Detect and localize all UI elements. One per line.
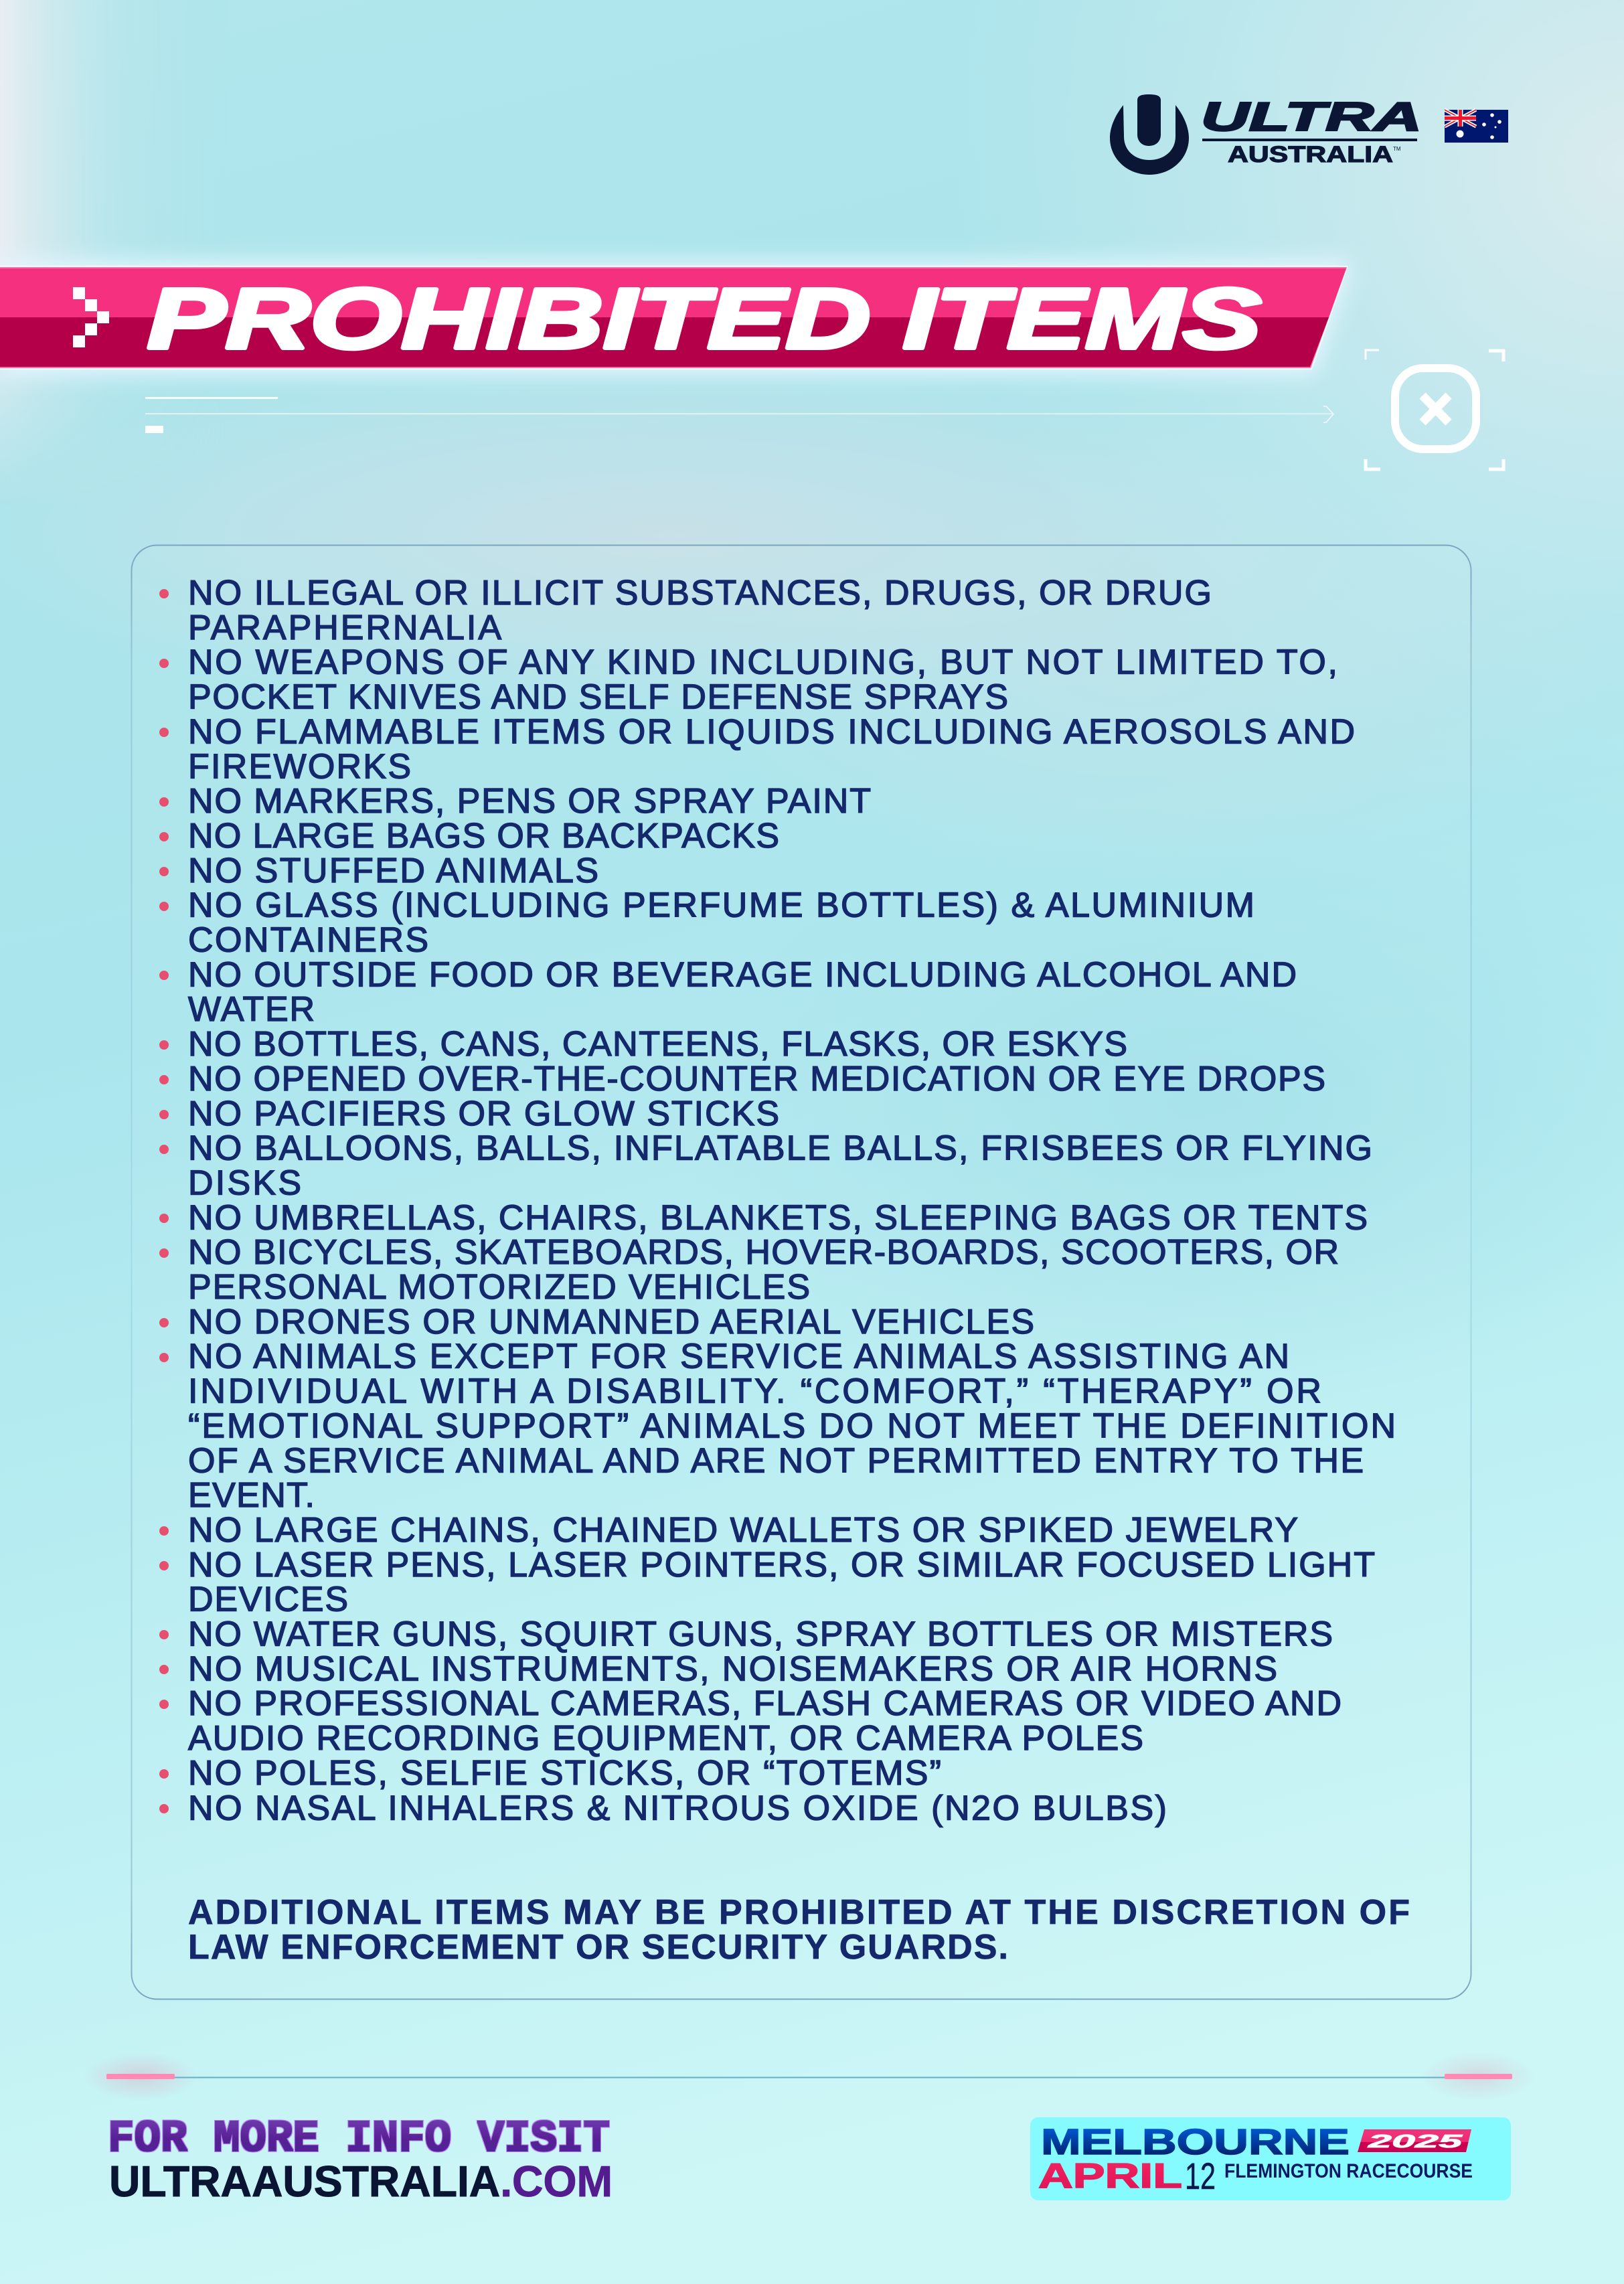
list item: drugs: PARAPHERNALIA bbox=[188, 608, 501, 647]
list item: glass bbox=[159, 886, 1254, 960]
icon: Ultra U mark bbox=[1110, 94, 1189, 175]
list item: inhalers: NO NASAL INHALERS & NITROUS OXIDE (N2O BULBS) bbox=[188, 1789, 1167, 1827]
icon: prohibited X bbox=[1366, 350, 1504, 469]
venue: FLEMINGTON RACECOURSE bbox=[1224, 2160, 1473, 2182]
wordmark: AUSTRALIA: AUSTRALIA bbox=[1228, 142, 1393, 167]
list item: bicycles: PERSONAL MOTORIZED VEHICLES bbox=[188, 1268, 810, 1307]
list item: animals: INDIVIDUAL WITH A DISABILITY. “COMFORT,” “THERAPY” OR bbox=[188, 1372, 1321, 1411]
list item: drones: NO DRONES OR UNMANNED AERIAL VEHICLES bbox=[188, 1303, 1034, 1341]
list item: food and beverage bbox=[159, 955, 1297, 1029]
city: MELBOURNE bbox=[1041, 2122, 1350, 2162]
closing note: LAW ENFORCEMENT OR SECURITY GUARDS. bbox=[188, 1928, 1008, 1967]
list item: instruments: NO MUSICAL INSTRUMENTS, NOISEMAKERS OR AIR HORNS bbox=[188, 1649, 1277, 1688]
footer: more info bbox=[108, 2114, 613, 2206]
panel: prohibited items list bbox=[131, 545, 1471, 1999]
title banner bbox=[0, 261, 1352, 375]
list item: cameras: NO PROFESSIONAL CAMERAS, FLASH CAMERAS OR VIDEO AND bbox=[188, 1684, 1342, 1723]
list item: glass: CONTAINERS bbox=[188, 921, 428, 960]
list item: bottles: NO BOTTLES, CANS, CANTEENS, FLASKS, OR ESKYS bbox=[188, 1025, 1127, 1064]
year tag: 2025 bbox=[1367, 2131, 1463, 2151]
list item: bicycles: NO BICYCLES, SKATEBOARDS, HOVER-BOARDS, SCOOTERS, OR bbox=[188, 1233, 1339, 1272]
list item: animals: OF A SERVICE ANIMAL AND ARE NOT PERMITTED ENTRY TO THE bbox=[188, 1441, 1364, 1480]
list item: medication: NO OPENED OVER-THE-COUNTER MEDICATION OR EYE DROPS bbox=[188, 1060, 1325, 1098]
list item: cameras: AUDIO RECORDING EQUIPMENT, OR CAMERA POLES bbox=[188, 1719, 1143, 1758]
list item: glass: NO GLASS (INCLUDING PERFUME BOTTLES) & ALUMINIUM bbox=[188, 886, 1254, 925]
list item: food and beverage: WATER bbox=[188, 990, 315, 1029]
list item: lasers: NO LASER PENS, LASER POINTERS, OR SIMILAR FOCUSED LIGHT bbox=[188, 1546, 1375, 1584]
list item: drugs bbox=[159, 574, 1212, 647]
icon: Australian flag bbox=[1445, 110, 1508, 143]
list item: animals: NO ANIMALS EXCEPT FOR SERVICE ANIMALS ASSISTING AN bbox=[188, 1337, 1289, 1376]
website url: ULTRAAUSTRALIA.COM bbox=[109, 2157, 613, 2206]
list item: poles: NO POLES, SELFIE STICKS, OR “TOTEMS” bbox=[188, 1754, 941, 1793]
closing note bbox=[188, 1893, 1410, 1967]
footer divider bbox=[84, 2052, 1535, 2101]
list item: drugs: NO ILLEGAL OR ILLICIT SUBSTANCES, DRUGS, OR DRUG bbox=[188, 574, 1212, 613]
list item: flammables: FIREWORKS bbox=[188, 747, 411, 786]
logo: Ultra Australia bbox=[1110, 94, 1422, 175]
list item: stuffed animals: NO STUFFED ANIMALS bbox=[188, 851, 598, 890]
list item: food and beverage: NO OUTSIDE FOOD OR BEVERAGE INCLUDING ALCOHOL AND bbox=[188, 955, 1297, 994]
icon: pixel chevron bbox=[73, 287, 109, 347]
list item: weapons: POCKET KNIVES AND SELF DEFENSE SPRAYS bbox=[188, 678, 1008, 717]
list item: bags: NO LARGE BAGS OR BACKPACKS bbox=[188, 817, 779, 855]
list item: chains: NO LARGE CHAINS, CHAINED WALLETS OR SPIKED JEWELRY bbox=[188, 1511, 1298, 1550]
list item: flammables: NO FLAMMABLE ITEMS OR LIQUIDS INCLUDING AEROSOLS AND bbox=[188, 712, 1355, 751]
list item: weapons: NO WEAPONS OF ANY KIND INCLUDING, BUT NOT LIMITED TO, bbox=[188, 643, 1337, 682]
badge: Melbourne event details bbox=[1030, 2117, 1511, 2200]
list item: water guns: NO WATER GUNS, SQUIRT GUNS, SPRAY BOTTLES OR MISTERS bbox=[188, 1615, 1333, 1653]
heading: for more info visit: FOR MORE INFO VISIT bbox=[108, 2114, 610, 2165]
decorative rule with arrow bbox=[145, 397, 1333, 433]
list item: animals: EVENT. bbox=[188, 1476, 315, 1515]
list item: balloons: DISKS bbox=[188, 1163, 301, 1202]
day: 12 bbox=[1185, 2155, 1216, 2197]
list item: flammables bbox=[159, 712, 1355, 786]
list item: pacifiers: NO PACIFIERS OR GLOW STICKS bbox=[188, 1094, 779, 1133]
list item: bicycles bbox=[159, 1233, 1339, 1307]
list item: balloons: NO BALLOONS, BALLS, INFLATABLE BALLS, FRISBEES OR FLYING bbox=[188, 1129, 1372, 1168]
logo: Ultra Australia: TM bbox=[1393, 146, 1401, 152]
list item: animals: “EMOTIONAL SUPPORT” ANIMALS DO NOT MEET THE DEFINITION bbox=[188, 1406, 1396, 1445]
list item: lasers bbox=[159, 1546, 1375, 1619]
list item: weapons bbox=[159, 643, 1337, 717]
closing note: ADDITIONAL ITEMS MAY BE PROHIBITED AT THE DISCRETION OF bbox=[188, 1893, 1410, 1932]
title: PROHIBITED ITEMS bbox=[147, 271, 1261, 367]
month: APRIL bbox=[1038, 2157, 1182, 2196]
list item: balloons bbox=[159, 1129, 1372, 1202]
list item: animals bbox=[159, 1337, 1396, 1515]
list item: lasers: DEVICES bbox=[188, 1580, 348, 1619]
list item: markers: NO MARKERS, PENS OR SPRAY PAINT bbox=[188, 782, 871, 821]
year tag bbox=[1358, 2129, 1471, 2152]
list item: umbrellas: NO UMBRELLAS, CHAIRS, BLANKETS, SLEEPING BAGS OR TENTS bbox=[188, 1198, 1368, 1237]
wordmark: ULTRA: ULTRA bbox=[1201, 94, 1422, 139]
list item: cameras bbox=[159, 1684, 1342, 1758]
